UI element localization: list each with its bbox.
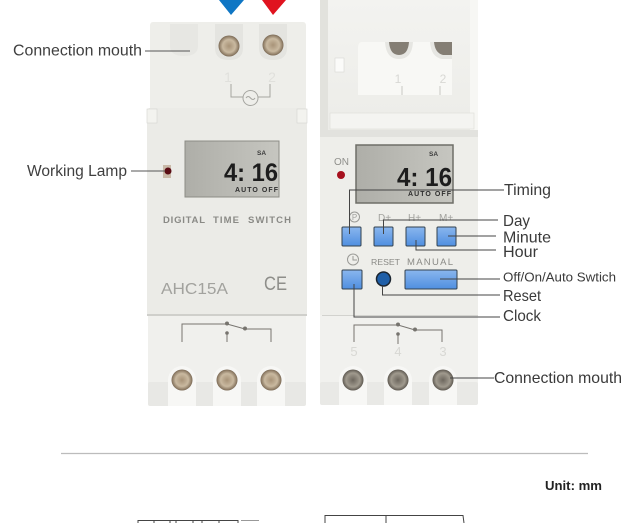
terminal numbers: 3 — [439, 344, 447, 359]
hinge bar — [330, 113, 474, 129]
hour button — [406, 227, 425, 246]
terminal numbers: 5 — [350, 344, 358, 359]
dimension drawing: side view — [138, 520, 259, 523]
button captions: RESET — [371, 257, 400, 267]
callout: clock: Clock — [503, 308, 542, 325]
icon: red polarity arrow — [262, 0, 286, 15]
LCD screen — [185, 141, 279, 197]
button captions: MANUAL — [407, 257, 453, 268]
terminal numbers: 2 — [268, 69, 276, 85]
day button — [374, 227, 393, 246]
connection slot — [170, 24, 198, 56]
product title: SWITCH — [248, 215, 291, 226]
callout: timing: Timing — [504, 182, 551, 199]
LCD screen: 4: 16 — [224, 159, 278, 187]
product title: DIGITAL — [163, 215, 205, 226]
front panel — [147, 108, 307, 316]
callout: reset: Reset — [503, 288, 542, 305]
icon: blue polarity arrow — [219, 0, 244, 15]
front panel — [320, 130, 478, 316]
lower terminal block — [148, 315, 306, 406]
icon: clock — [348, 254, 358, 265]
LCD screen — [356, 145, 453, 203]
left latch — [147, 109, 157, 123]
callout: clock — [354, 284, 542, 325]
open cover — [320, 0, 478, 132]
LCD screen: 4: 16 — [397, 162, 452, 192]
upper terminal block — [150, 22, 306, 112]
callout: connection mouth left: Connection mouth — [13, 42, 142, 60]
screw recesses — [168, 366, 285, 406]
callout: minute: Minute — [503, 230, 551, 246]
icon: cover right screw — [430, 42, 452, 59]
callout: hour: Hour — [503, 244, 539, 261]
icon: lower middle screw — [388, 370, 408, 390]
button captions: P — [352, 213, 357, 222]
LCD screen: AUTO OFF — [408, 191, 452, 198]
terminal numbers: 1 — [224, 69, 232, 85]
terminal numbers — [224, 69, 276, 85]
icon: lower right screw — [432, 370, 454, 390]
button captions: M+ — [439, 213, 453, 224]
icon: lower left screw — [342, 370, 364, 390]
icon: relay contact symbol — [182, 322, 271, 342]
minute button — [437, 227, 456, 246]
panel: open timer device — [320, 0, 478, 405]
CE mark: CE — [264, 274, 287, 295]
LCD screen: SA — [429, 151, 438, 158]
cover latch — [335, 58, 344, 72]
dimension drawing: front view — [325, 516, 464, 523]
button captions: H+ — [408, 213, 421, 224]
product title: TIME — [213, 215, 239, 226]
cover numbers — [395, 72, 447, 95]
product title — [163, 215, 291, 226]
cover window — [358, 42, 452, 95]
callout: hour — [416, 240, 539, 261]
callout: day: Day — [503, 213, 530, 230]
icon: lower right screw — [260, 370, 282, 390]
callout: off on auto switch: Off/On/Auto Swtich — [503, 270, 616, 284]
callout: connection mouth right: Connection mouth — [494, 370, 622, 387]
manual button — [405, 270, 457, 289]
cover numbers: 2 — [440, 72, 447, 86]
icon: top right screw — [262, 34, 284, 56]
terminal numbers: 4 — [394, 344, 402, 359]
unit label: Unit: mm — [545, 478, 602, 493]
icon: working lamp — [163, 165, 172, 178]
button captions: D+ — [378, 213, 391, 224]
icon: top left screw — [218, 36, 240, 56]
LCD screen: SA — [257, 150, 266, 157]
icon: cover left screw — [385, 42, 413, 59]
lower terminal block — [320, 315, 478, 405]
ON label: ON — [334, 157, 349, 168]
LCD screen: AUTO OFF — [235, 187, 279, 194]
right latch — [297, 109, 307, 123]
terminal numbers — [350, 344, 447, 359]
callout: day — [384, 213, 530, 234]
icon: lower middle screw — [216, 370, 238, 390]
icon: lower left screw — [172, 370, 192, 390]
clock button — [342, 270, 362, 289]
icon: relay contact symbol — [354, 323, 442, 344]
timing button — [342, 227, 361, 246]
reset button — [376, 272, 390, 286]
callout: reset — [382, 286, 542, 305]
cover numbers: 1 — [395, 72, 402, 86]
icon: on lamp — [337, 171, 345, 179]
screw recesses — [339, 366, 457, 405]
callout: working lamp: Working Lamp — [27, 163, 127, 180]
callout: minute — [448, 230, 551, 246]
panel: closed timer device — [147, 22, 307, 406]
callout: timing — [350, 182, 551, 234]
button captions — [350, 212, 453, 268]
icon: AC supply symbol — [231, 84, 270, 106]
model name: AHC15A — [161, 281, 228, 298]
